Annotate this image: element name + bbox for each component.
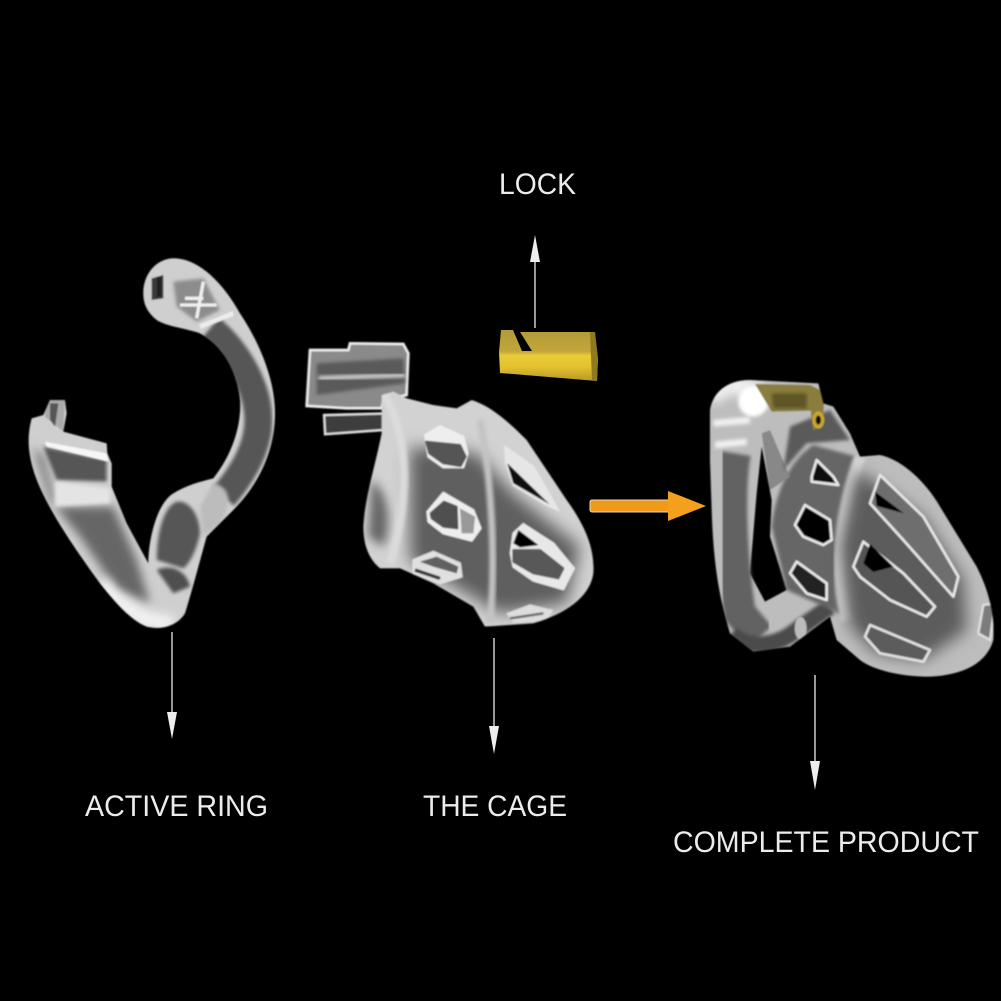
product opening f [865, 625, 930, 662]
ring shading [210, 328, 258, 497]
part: complete product [710, 380, 995, 677]
part: the cage [307, 343, 593, 627]
cage opening lower right [511, 524, 574, 589]
arrow: orange assembly arrow [590, 491, 706, 521]
cage body [363, 392, 593, 627]
product cage shell shading [840, 470, 967, 660]
product ring rivet [795, 617, 807, 640]
product ring shading [731, 453, 760, 637]
cage opening lower left [413, 552, 462, 583]
product opening c [790, 562, 827, 600]
part: active ring [29, 258, 275, 628]
cage opening bottom right [506, 604, 553, 623]
cage upper pin block [307, 343, 408, 408]
label: the cage: THE CAGE [423, 790, 567, 823]
product opening e [853, 542, 935, 617]
product opening b [795, 505, 832, 545]
product lock window [755, 384, 824, 431]
label: complete product: COMPLETE PRODUCT [673, 826, 979, 859]
cage opening upper left [425, 426, 468, 467]
product opening a [812, 460, 838, 485]
product opening d [870, 475, 958, 597]
arrow: the cage [489, 638, 499, 754]
ring bulb [157, 502, 200, 568]
cage opening middle left [427, 493, 481, 541]
icon: gold lock [499, 330, 598, 381]
cage opening upper right [505, 447, 558, 510]
arrow: to lock label [530, 235, 540, 328]
ring knob detail [152, 275, 163, 300]
ring inner steps [45, 442, 108, 462]
arrow: active ring [167, 632, 177, 739]
product opening g [978, 603, 995, 640]
cage lower pin [324, 413, 385, 434]
cage shading [410, 447, 580, 613]
label: active ring: ACTIVE RING [85, 790, 268, 823]
label: lock: LOCK [499, 168, 576, 201]
product collar [772, 445, 857, 617]
arrow: complete product [810, 675, 820, 790]
